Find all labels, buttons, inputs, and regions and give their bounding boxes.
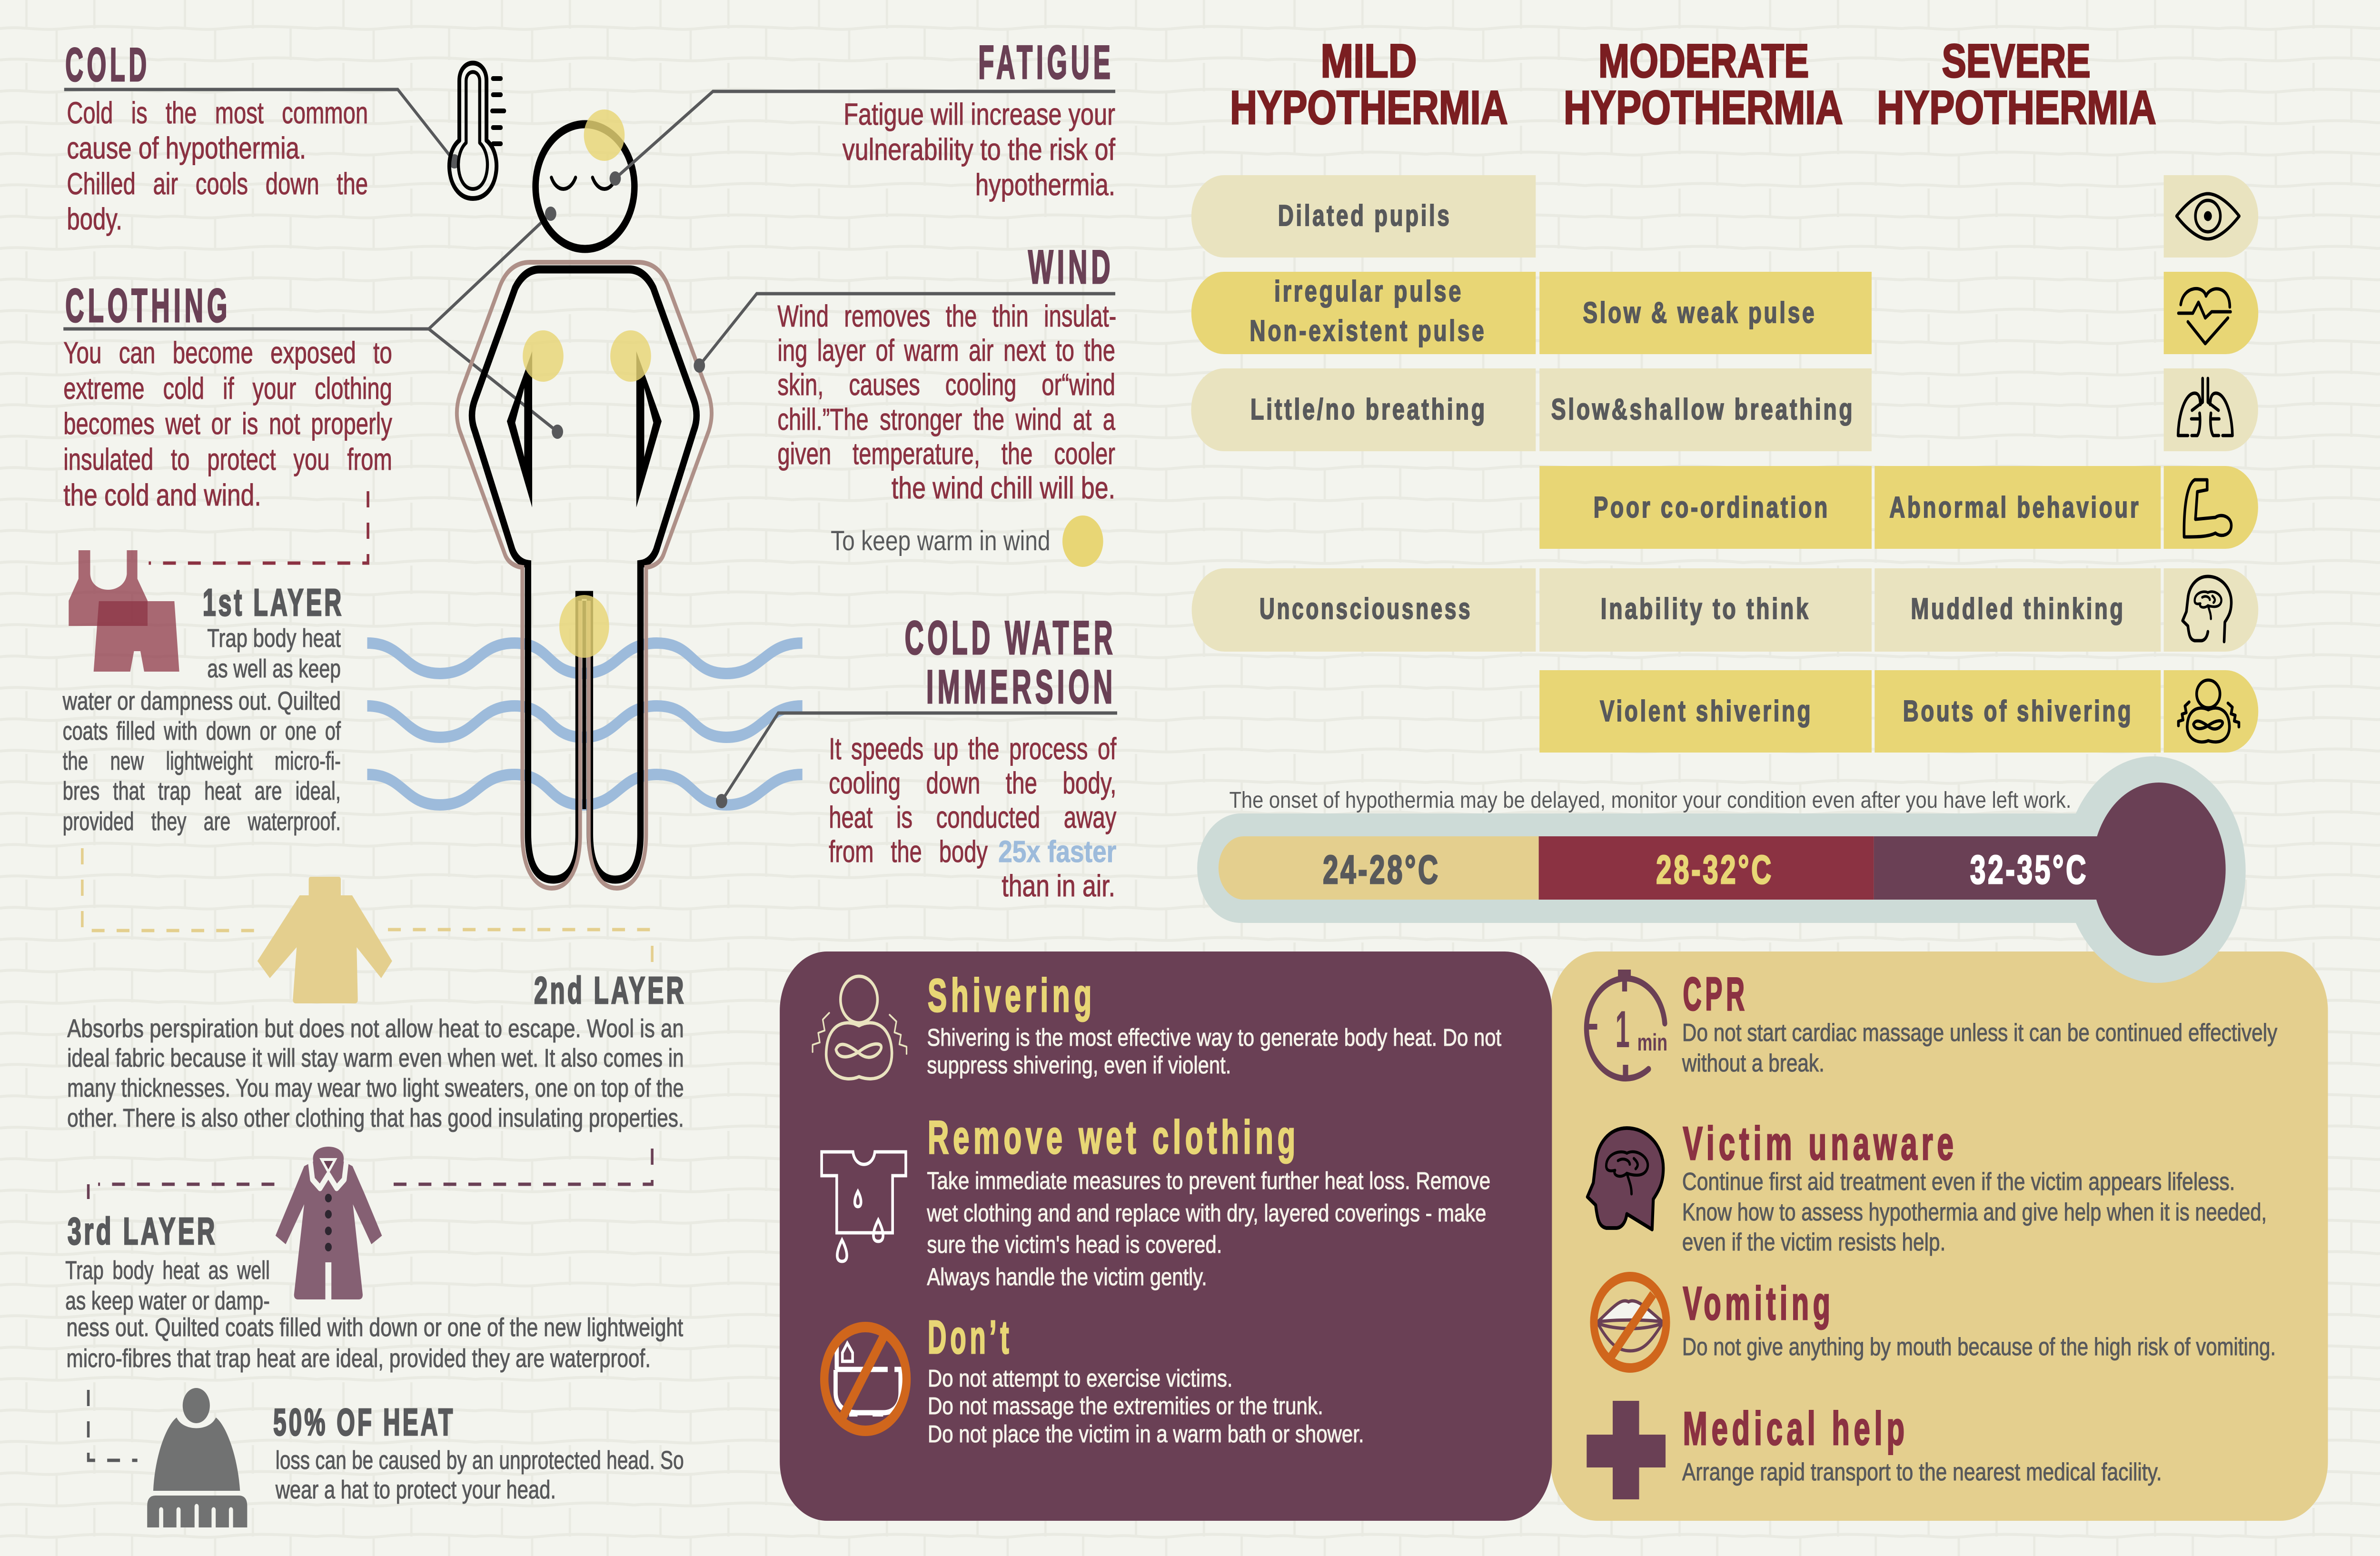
table row: thinking: Unconsciousness	[1259, 592, 1472, 625]
text block: second layer: other. There is also other clothing that has good insulating properties.	[67, 1104, 684, 1132]
icon: no mouth	[1594, 1277, 1666, 1368]
table headers: SEVERE	[1942, 34, 2091, 87]
text block: fatigue	[843, 98, 1116, 202]
text block: wind: skin, causes cooling or“wind	[777, 368, 1115, 402]
text block: wind: chill.”The stronger the wind at a	[777, 403, 1116, 436]
panel: purple first aid	[780, 951, 1552, 1521]
heading: clothing: CLOTHING	[65, 279, 231, 332]
item: shivering	[927, 969, 1501, 1079]
segment: 32-35 with bulb	[1874, 783, 2226, 956]
icon: third layer coat	[276, 1147, 382, 1299]
text block: fatigue: hypothermia.	[975, 168, 1115, 202]
item: shivering: suppress shivering, even if violent.	[927, 1051, 1231, 1079]
table headers: MODERATE	[1598, 34, 1809, 87]
text block: cold: Chilled air cools down the	[67, 167, 368, 201]
text block: cold water immersion: heat is conducted away	[829, 801, 1116, 834]
item: vomiting	[1682, 1277, 2276, 1360]
icon: eye	[2177, 194, 2239, 239]
leader line: wind	[694, 294, 1115, 373]
text block: first layer: bres that trap heat are ideal,	[63, 777, 341, 805]
heading: cold water immersion: COLD WATER	[905, 611, 1116, 664]
segment: 24-28: 24-28°C	[1323, 848, 1440, 892]
panel: third layer	[65, 1210, 684, 1373]
item: medical help: Arrange rapid transport to the nearest medical facility.	[1682, 1458, 2162, 1486]
table row: shivering: Violent shivering	[1600, 694, 1813, 727]
dashed connector: hat	[89, 1390, 138, 1460]
heading: cold water immersion	[905, 611, 1116, 713]
inner leg line	[582, 601, 586, 809]
body outline: black	[472, 269, 696, 880]
item: medical help	[1682, 1402, 2162, 1486]
icon: shivering person	[813, 976, 907, 1079]
thermometer casing	[1197, 756, 2242, 980]
segment: 32-35 with bulb: 32-35°C	[1970, 848, 2088, 892]
text block: cold	[67, 96, 368, 236]
warm spots	[523, 109, 651, 658]
segment: 28-32	[1539, 836, 1874, 900]
text block: wind: the wind chill will be.	[892, 471, 1115, 505]
item: remove wet clothing: Remove wet clothing	[928, 1111, 1299, 1163]
temperature thermometer	[1197, 756, 2246, 983]
panel: cold water immersion	[829, 611, 1117, 903]
table row: pulse: Slow & weak pulse	[1583, 296, 1816, 329]
text block: third layer: micro-fibres that trap heat are ideal, provided they are waterproof.	[67, 1344, 651, 1373]
table row: pupils	[1191, 175, 2258, 258]
table row: pulse: irregular pulse	[1274, 274, 1463, 307]
text block: clothing: extreme cold if your clothing	[63, 372, 392, 406]
heading: cold: COLD	[65, 38, 150, 91]
item: cpr: without a break.	[1682, 1049, 1825, 1077]
note: onset: The onset of hypothermia may be delayed, monitor your condition even after you have left work.	[1229, 788, 2071, 813]
heading: cold water immersion: IMMERSION	[926, 660, 1116, 713]
item: do not: Do not massage the extremities or the trunk.	[928, 1392, 1323, 1419]
text block: cold water immersion	[829, 732, 1117, 903]
icon: heart	[2179, 288, 2231, 344]
table row: thinking	[1192, 568, 2258, 652]
text block: cold water immersion: 25x faster	[998, 835, 1116, 869]
icon: second layer sweater	[258, 877, 392, 1003]
panel: wind	[777, 240, 1116, 567]
item: cpr	[1682, 968, 2278, 1077]
panel: fatigue	[843, 36, 1116, 202]
table headers: HYPOTHERMIA	[1230, 81, 1508, 134]
text block: cold water immersion: cooling down the body,	[829, 766, 1116, 800]
heading: wind: WIND	[1028, 240, 1114, 293]
text block: cold: cause of hypothermia.	[67, 131, 306, 165]
segment: 24-28	[1219, 836, 1539, 900]
text block: third layer: ness out. Quilted coats filled with down or one of the new lightweight	[67, 1313, 684, 1342]
arm gaps	[507, 351, 662, 507]
text block: wind: ing layer of warm air next to the	[777, 334, 1115, 367]
text block: clothing	[63, 336, 392, 512]
panel: second layer	[67, 970, 686, 1132]
text block: first layer: as well as keep	[207, 654, 341, 683]
text block: cold: body.	[67, 202, 122, 236]
item: victim unaware: even if the victim resists help.	[1682, 1228, 1945, 1256]
table row: shivering	[1539, 670, 2258, 753]
table row: breathing: Little/no breathing	[1250, 392, 1487, 426]
item: cpr: Do not start cardiac massage unless it can be continued effectively	[1682, 1019, 2278, 1046]
table headers: HYPOTHERMIA	[1564, 81, 1843, 134]
text block: third layer: as keep water or damp-	[65, 1287, 270, 1315]
table headers: MILD	[1320, 34, 1417, 87]
text block: first layer: provided they are waterproof.	[63, 807, 341, 836]
table headers	[1230, 34, 2156, 134]
eyes	[551, 178, 616, 189]
heading: fatigue: FATIGUE	[978, 36, 1114, 89]
icon: one minute stopwatch	[1587, 970, 1667, 1079]
text block: third layer: Trap body heat as well	[65, 1256, 270, 1285]
table row: pulse: Non-existent pulse	[1250, 314, 1486, 347]
icon: hat	[147, 1388, 247, 1527]
item: do not: Don’t	[928, 1311, 1012, 1363]
text block: first layer: coats filled with down or one of	[63, 717, 341, 745]
icon: shivering person	[2179, 680, 2239, 742]
text block: first layer: water or dampness out. Quilted	[62, 687, 341, 715]
text block: first layer: Trap body heat	[207, 624, 341, 653]
text block: wind: Wind removes the thin insulat-	[777, 299, 1116, 333]
item: shivering: Shivering is the most effective way to generate body heat. Do not	[927, 1023, 1501, 1051]
item: do not	[928, 1311, 1364, 1447]
body outline: rose	[457, 262, 712, 888]
text block: cold water immersion: It speeds up the process of	[829, 732, 1117, 766]
item: vomiting: Vomiting	[1683, 1277, 1834, 1329]
text block: cold: Cold is the most common	[67, 96, 368, 130]
text block: cold water immersion: from the body	[829, 835, 988, 869]
icon: one minute stopwatch: min	[1637, 1029, 1667, 1056]
item: medical help: Medical help	[1683, 1402, 1909, 1455]
text block: third layer	[65, 1256, 684, 1373]
text block: clothing: the cold and wind.	[63, 478, 261, 512]
text block: second layer: Absorbs perspiration but does not allow heat to escape. Wool is an	[67, 1014, 684, 1043]
item: remove wet clothing: Always handle the victim gently.	[927, 1263, 1207, 1290]
icon: first layer underwear	[69, 550, 179, 672]
leader line: cold water	[716, 713, 1117, 808]
text block: fifty percent of heat: wear a hat to protect your head.	[275, 1476, 556, 1504]
panel: fifty percent of heat	[273, 1401, 684, 1504]
text block: first layer	[62, 624, 341, 836]
text block: cold water immersion: than in air.	[1002, 869, 1115, 903]
head	[536, 124, 635, 249]
table headers: HYPOTHERMIA	[1877, 81, 2156, 134]
heading: fifty percent of heat: 50% OF HEAT	[273, 1401, 455, 1444]
item: remove wet clothing: Take immediate measures to prevent further heat loss. Remove	[927, 1167, 1490, 1194]
table row: coordination: Abnormal behaviour	[1889, 490, 2141, 524]
text block: first layer: the new lightweight micro-fi-	[63, 747, 341, 775]
table row: thinking: Muddled thinking	[1911, 592, 2125, 625]
text block: clothing: You can become exposed to	[63, 336, 392, 370]
item: do not: Do not attempt to exercise victims.	[928, 1364, 1233, 1392]
icon: thermometer	[449, 63, 504, 198]
icon: medical cross	[1587, 1401, 1666, 1499]
table row: breathing: Slow&shallow breathing	[1551, 392, 1854, 426]
text block: fifty percent of heat: loss can be caused by an unprotected head. So	[276, 1446, 684, 1475]
legend: keep warm	[831, 515, 1103, 567]
waves: cold water	[367, 643, 803, 805]
table row: pupils: Dilated pupils	[1278, 198, 1451, 232]
figure: human body	[457, 109, 712, 888]
item: shivering: Shivering	[928, 969, 1096, 1021]
icon: arm	[2184, 480, 2231, 537]
dashed connector: second layer	[82, 848, 654, 963]
item: victim unaware: Victim unaware	[1683, 1117, 1958, 1169]
icon: one minute stopwatch: 1	[1616, 1000, 1630, 1059]
dashed connector: third layer	[89, 1149, 652, 1199]
item: remove wet clothing: sure the victim's head is covered.	[927, 1230, 1222, 1258]
table row: breathing	[1191, 368, 2258, 451]
item: do not: Do not place the victim in a warm bath or shower.	[928, 1420, 1364, 1447]
panel: tan first aid	[1550, 951, 2328, 1521]
item: victim unaware	[1682, 1117, 2267, 1256]
legend: keep warm: To keep warm in wind	[831, 526, 1051, 556]
text block: fifty percent of heat	[275, 1446, 684, 1504]
table row: shivering: Bouts of shivering	[1903, 694, 2133, 727]
item: victim unaware: Continue first aid treatment even if the victim appears lifeless.	[1682, 1168, 2235, 1195]
leader line: cold	[64, 89, 460, 168]
icon: head and brain	[2182, 576, 2231, 642]
item: victim unaware: Know how to assess hypothermia and give help when it is needed,	[1682, 1198, 2267, 1226]
segment: 28-32: 28-32°C	[1656, 848, 1774, 892]
item: cpr: CPR	[1683, 968, 1748, 1020]
panel: first layer	[62, 582, 344, 836]
item: remove wet clothing: wet clothing and and replace with dry, layered coverings - make	[926, 1199, 1486, 1227]
text block: clothing: insulated to protect you from	[63, 443, 392, 476]
item: remove wet clothing	[926, 1111, 1490, 1290]
item: vomiting: Do not give anything by mouth because of the high risk of vomiting.	[1682, 1333, 2276, 1360]
panel: cold	[65, 38, 368, 236]
icon: wet shirt	[822, 1152, 906, 1261]
text block: wind: given temperature, the cooler	[777, 437, 1115, 471]
heading: second layer: 2nd LAYER	[534, 970, 686, 1012]
text block: second layer: ideal fabric because it will stay warm even when wet. It also comes in	[67, 1044, 684, 1072]
text block: second layer: many thicknesses. You may wear two light sweaters, one on top of the	[67, 1074, 684, 1102]
heading: first layer: 1st LAYER	[203, 582, 344, 624]
text block: fatigue: Fatigue will increase your	[843, 98, 1115, 131]
icon: head with brain	[1587, 1128, 1663, 1229]
table row: coordination	[1539, 466, 2258, 549]
text block: second layer	[67, 1014, 684, 1132]
leader line: clothing	[63, 207, 563, 439]
text block: wind	[777, 299, 1116, 505]
table row: pulse	[1191, 272, 2258, 354]
heading: third layer: 3rd LAYER	[68, 1210, 218, 1253]
panel: clothing	[63, 279, 392, 512]
dashed connector: clothing to first layer	[149, 491, 368, 563]
table row: coordination: Poor co-ordination	[1594, 490, 1830, 524]
table row: thinking: Inability to think	[1601, 592, 1811, 625]
leader line: fatigue	[610, 91, 1115, 186]
icon: no bath	[824, 1327, 907, 1431]
icon: lungs	[2178, 378, 2232, 436]
text block: fatigue: vulnerability to the risk of	[843, 133, 1116, 167]
text block: clothing: becomes wet or is not properly	[63, 407, 392, 441]
